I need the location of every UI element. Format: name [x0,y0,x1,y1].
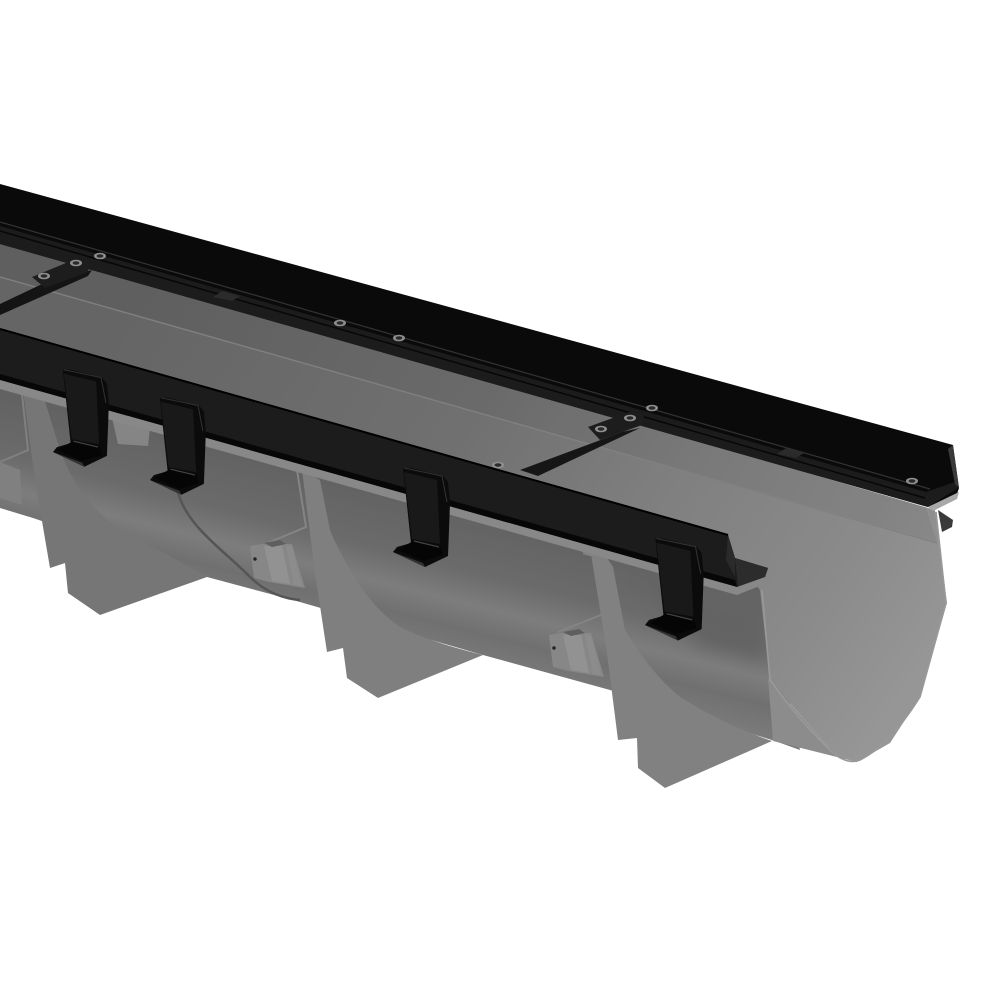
right bay shadow [640,575,765,660]
rib 1 with foot [23,390,207,615]
rail logos [213,291,804,458]
trough interior and end face [0,238,947,762]
trough fold line [0,277,937,543]
curved seam [178,492,300,600]
lower black rail [0,329,768,595]
cross strap left [0,253,106,315]
end tab [938,510,953,532]
rib 3 with foot [590,548,772,788]
clips [53,370,704,640]
upper black rail [0,184,959,511]
end face lower rim [768,678,857,762]
channel body [0,368,800,750]
cross strap right [520,405,658,476]
rib 2 with foot [302,470,483,698]
gussets [258,465,306,547]
side nubs [0,418,604,677]
rail bolts [334,320,918,484]
